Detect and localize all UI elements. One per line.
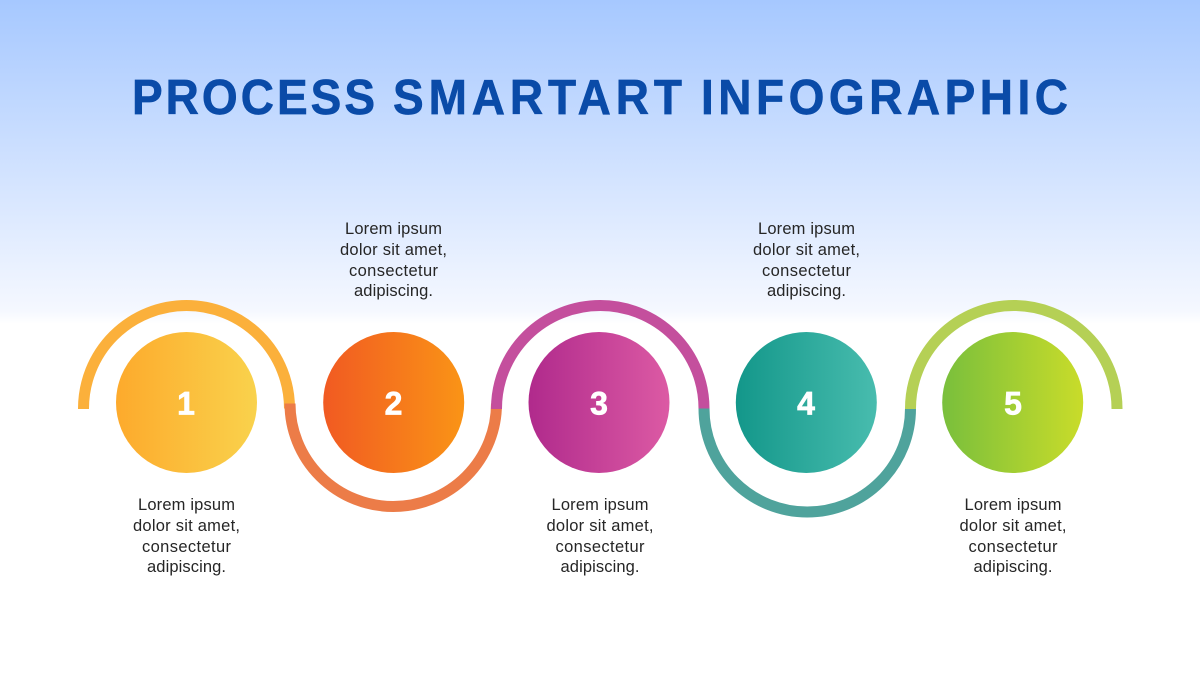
step 5 xyxy=(942,332,1083,576)
step 2 number: 2 xyxy=(385,386,402,422)
title: SMARTART xyxy=(393,71,682,125)
step 4 circle xyxy=(736,332,877,473)
step 1 text: consectetur xyxy=(142,538,232,556)
step 5 circle xyxy=(942,332,1083,473)
step 3 text xyxy=(546,496,654,576)
step 2 text xyxy=(340,220,447,300)
step 4 number: 4 xyxy=(797,386,815,422)
arc connector 1 xyxy=(84,306,290,409)
step 3 xyxy=(528,332,670,576)
step 3 number: 3 xyxy=(590,386,608,422)
step 4 text: consectetur xyxy=(762,262,852,280)
step 3 text: adipiscing. xyxy=(560,558,640,576)
step 2 text: dolor sit amet, xyxy=(340,241,447,259)
arc connector 3 xyxy=(496,306,704,409)
step 2 text: Lorem ipsum xyxy=(345,220,442,238)
step 1 text xyxy=(133,496,240,576)
step 4 text: adipiscing. xyxy=(767,282,846,300)
step 5 text: Lorem ipsum xyxy=(964,496,1062,514)
step 5 text: adipiscing. xyxy=(974,558,1052,576)
step 1 circle xyxy=(116,332,257,473)
step 3 text: dolor sit amet, xyxy=(546,517,654,535)
step 2 circle xyxy=(323,332,464,473)
step 4 text: dolor sit amet, xyxy=(753,241,860,259)
step 2 text: adipiscing. xyxy=(354,282,433,300)
arc connector 5 xyxy=(910,306,1117,409)
step 1 text: dolor sit amet, xyxy=(133,517,240,535)
step 3 text: Lorem ipsum xyxy=(552,496,648,514)
step 5 text xyxy=(960,496,1066,576)
arc connector 2 xyxy=(290,404,496,506)
step 5 text: dolor sit amet, xyxy=(960,517,1066,535)
step 2 text: consectetur xyxy=(349,262,438,280)
step 1 number: 1 xyxy=(177,386,195,422)
title xyxy=(132,71,1068,125)
step 5 text: consectetur xyxy=(968,538,1058,556)
step 4 text: Lorem ipsum xyxy=(758,220,855,238)
step 3 circle xyxy=(528,332,670,473)
title: INFOGRAPHIC xyxy=(701,71,1068,125)
step 5 number: 5 xyxy=(1004,386,1022,422)
step 4 xyxy=(736,220,877,473)
background gradient xyxy=(0,0,1200,324)
step 1 text: Lorem ipsum xyxy=(138,496,235,514)
title: PROCESS xyxy=(132,71,375,125)
step 1 xyxy=(116,332,257,576)
step 2 xyxy=(323,220,464,473)
step 4 text xyxy=(753,220,860,300)
step 1 text: adipiscing. xyxy=(147,558,226,576)
step 3 text: consectetur xyxy=(556,538,645,556)
arc connector 4 xyxy=(704,408,910,512)
